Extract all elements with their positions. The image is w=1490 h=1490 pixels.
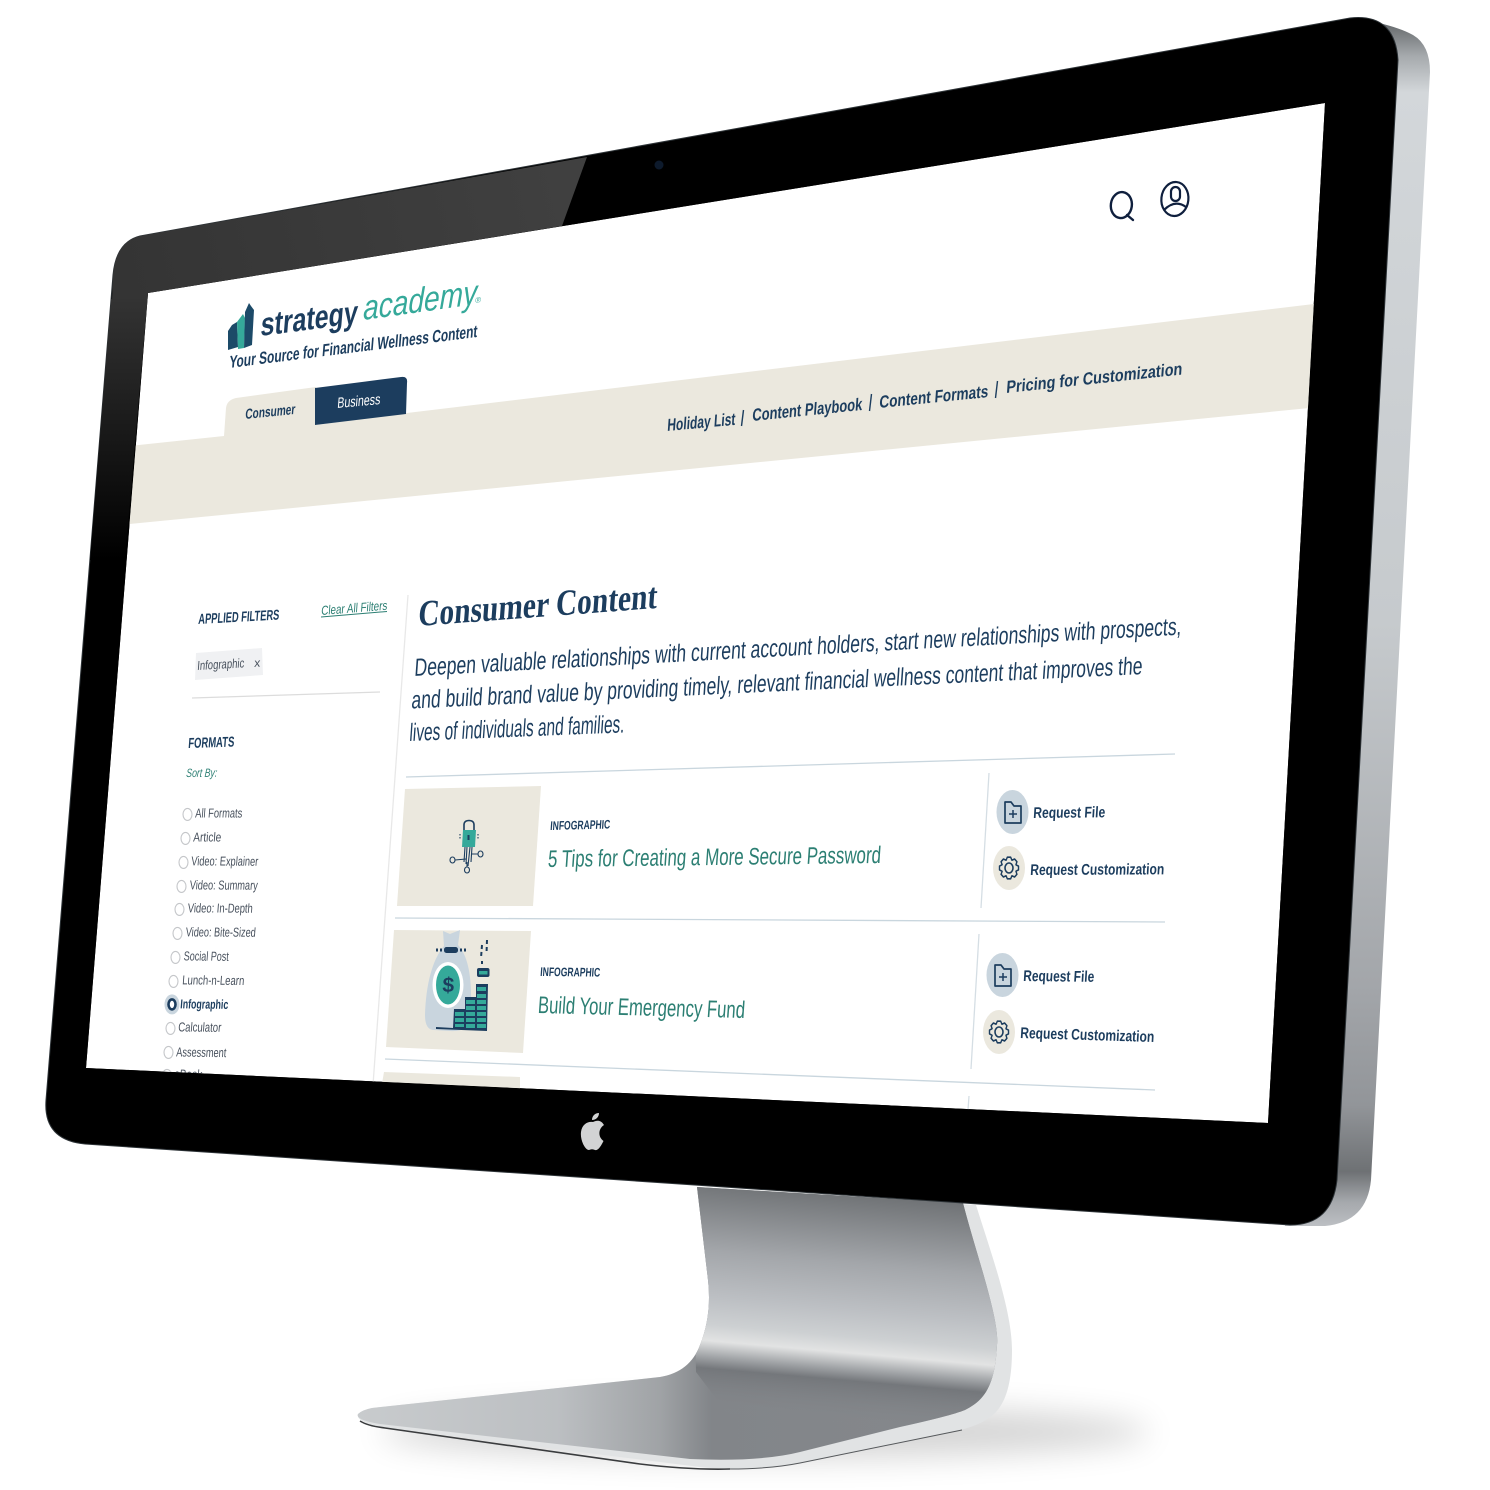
- format radio list: All Formats: [195, 805, 243, 820]
- illustration: money bag and coins: [425, 930, 490, 1031]
- icon: padlock circuit: [450, 820, 483, 873]
- illustration: money bag and coins: $: [442, 974, 455, 997]
- logo: strategy academy: [228, 285, 481, 368]
- bezel glare left side: [90, 299, 148, 560]
- format radio list: Lunch-n-Learn: [182, 972, 245, 988]
- webcam: [654, 160, 664, 170]
- thumbnail: emergency fund: [386, 930, 531, 1053]
- applied filters heading: APPLIED FILTERS: [198, 608, 280, 628]
- sidebar filters: [162, 598, 388, 1082]
- intro paragraph: and build brand value by providing timely, relevant financial wellness content that improves the: [411, 652, 1144, 714]
- format radio list: Video: Bite-Sized: [185, 924, 256, 940]
- format radio list: Article: [193, 829, 222, 844]
- content row 1: [397, 773, 1165, 908]
- stand shadow: [380, 1406, 1150, 1458]
- logo wordmark strategy: strategy: [259, 295, 360, 344]
- icon: request file: [996, 790, 1028, 834]
- format radio list: [162, 805, 259, 1082]
- action: request customization: Request Customization: [1030, 861, 1165, 879]
- top navigation: Holiday List: [667, 409, 736, 435]
- format radio list: Video: In-Depth: [187, 900, 253, 916]
- logo tagline: Your Source for Financial Wellness Content: [229, 321, 478, 372]
- top navigation: Content Playbook: [752, 394, 863, 425]
- icon: request customization: [993, 846, 1025, 890]
- bezel glare: [112, 157, 587, 300]
- clear all filters link: Clear All Filters: [321, 598, 388, 618]
- tab label: business: Business: [337, 391, 381, 412]
- format radio list: Video: Summary: [189, 877, 259, 893]
- monitor stand: [358, 1187, 1012, 1470]
- icon: search: [1109, 191, 1134, 220]
- logo book icon: [228, 303, 254, 350]
- format radio list: Calculator: [178, 1019, 222, 1035]
- screen: [86, 103, 1330, 1123]
- icon: request file: [986, 953, 1018, 997]
- icon: request customization: [983, 1010, 1015, 1054]
- top navigation: Content Formats: [879, 381, 989, 412]
- sort by label: Sort By:: [186, 766, 218, 780]
- applied filter chip: Infographic: [197, 655, 245, 673]
- applied filter chip: x: [254, 656, 261, 670]
- title: 5 Tips for Creating a More Secure Password: [547, 842, 882, 873]
- monitor black bezel: [46, 18, 1398, 1225]
- clear all filters link: [321, 602, 387, 618]
- content row 3 thumbnail: [380, 1072, 520, 1100]
- format radio list: Video: Explainer: [191, 853, 259, 869]
- title: Build Your Emergency Fund: [537, 992, 746, 1024]
- intro paragraph: lives of individuals and families.: [409, 710, 626, 747]
- intro paragraph: [409, 613, 1183, 747]
- action: request file: Request File: [1023, 968, 1095, 986]
- logo wordmark academy: academy: [363, 273, 480, 328]
- action: request customization: Request Customization: [1020, 1025, 1155, 1046]
- tab: business: [315, 377, 407, 425]
- content row 2: [386, 930, 1155, 1069]
- beige navigation band: [120, 302, 1330, 525]
- heading: consumer content: Consumer Content: [417, 576, 659, 635]
- label: infographic: INFOGRAPHIC: [550, 818, 611, 833]
- monitor rear silver edge: [1285, 18, 1430, 1226]
- formats heading: FORMATS: [188, 735, 235, 752]
- action: request file: Request File: [1033, 804, 1106, 822]
- format radio list: Infographic: [180, 996, 229, 1012]
- top navigation: [668, 364, 1182, 432]
- applied filter chip: [195, 648, 263, 680]
- label: infographic: INFOGRAPHIC: [540, 965, 601, 980]
- format radio list: Assessment: [176, 1044, 227, 1060]
- intro paragraph: Deepen valuable relationships with current account holders, start new relationships with prospects,: [414, 613, 1183, 682]
- logo registered mark: ®: [475, 295, 482, 305]
- icon: user: [1160, 181, 1190, 217]
- format radio list: eBook: [174, 1066, 203, 1082]
- apple logo: [581, 1113, 604, 1150]
- thumbnail: password: [397, 786, 541, 906]
- tab label: consumer: Consumer: [245, 402, 296, 423]
- top navigation: Pricing for Customization: [1006, 359, 1183, 397]
- format radio list: Social Post: [183, 948, 230, 964]
